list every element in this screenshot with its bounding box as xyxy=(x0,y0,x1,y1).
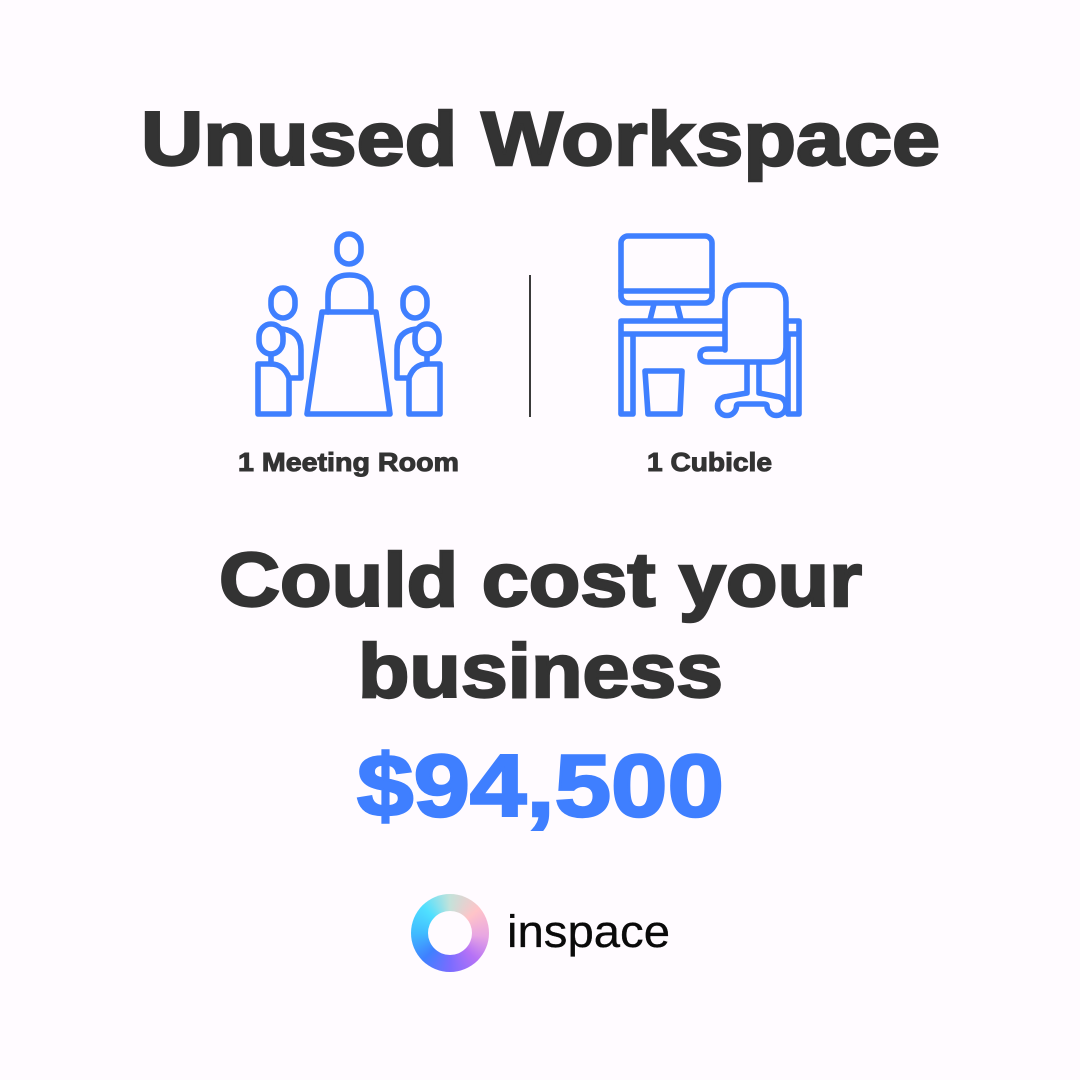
label: 1 cubicle: 1 Cubicle xyxy=(647,447,772,477)
label: 1 meeting room: 1 Meeting Room xyxy=(238,447,459,477)
title: Unused Workspace xyxy=(141,97,940,182)
divider xyxy=(529,275,531,417)
logo ring xyxy=(411,894,489,972)
logo wordmark: inspace xyxy=(507,906,670,957)
icon: meeting room xyxy=(258,234,440,414)
subheading line 2: business xyxy=(358,629,723,714)
subheading line 1: Could cost your xyxy=(219,538,862,623)
icon: cubicle desk xyxy=(621,236,799,416)
cost figure: $94,500 xyxy=(357,736,724,835)
